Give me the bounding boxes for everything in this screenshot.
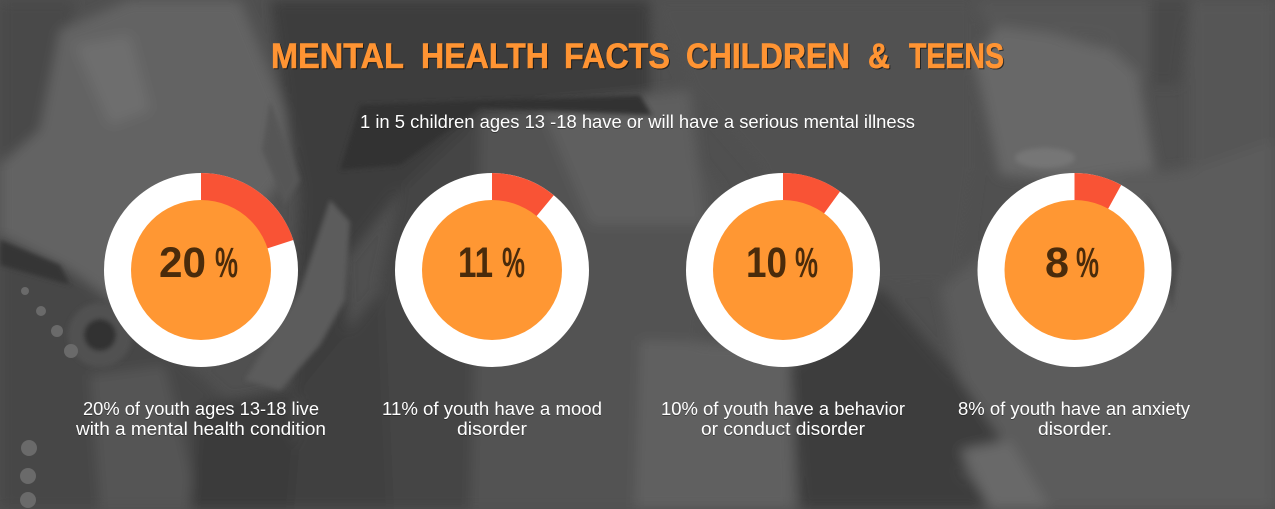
title: & (868, 37, 890, 76)
donut chart: 20%: 20 (159, 239, 206, 287)
caption: 20% (75, 399, 326, 439)
donut chart: 8%: 8 (1045, 239, 1069, 287)
donut chart: 8% (978, 173, 1172, 367)
caption: 10% (661, 399, 905, 439)
donut chart: 11%: % (502, 239, 525, 287)
title: HEALTH (421, 37, 549, 76)
donut chart: 20% (104, 173, 298, 367)
caption: 8% (958, 399, 1190, 439)
title: MENTAL (271, 37, 404, 76)
caption: 10%: or conduct disorder (701, 419, 865, 439)
caption: 8%: 8% of youth have an anxiety (958, 399, 1190, 419)
caption: 20%: with a mental health condition (75, 419, 326, 439)
donut chart: 11%: 11 (458, 239, 493, 287)
title: FACTS (564, 37, 670, 76)
title: TEENS (909, 37, 1004, 76)
caption: 11%: disorder (457, 419, 527, 439)
caption: 8%: disorder. (1038, 419, 1112, 439)
donut chart: 20%: % (215, 239, 238, 287)
title: CHILDREN (686, 37, 850, 76)
caption: 11% (382, 399, 602, 439)
donut chart: 10%: 10 (746, 239, 787, 287)
donut chart: 11% (395, 173, 589, 367)
donut chart: 10%: % (795, 239, 818, 287)
caption: 11%: 11% of youth have a mood (382, 399, 602, 419)
caption: 20%: 20% of youth ages 13-18 live (83, 399, 319, 419)
subtitle: 1 in 5 children ages 13 -18 have or will have a serious mental illness (360, 112, 915, 132)
caption: 10%: 10% of youth have a behavior (661, 399, 905, 419)
donut chart: 8%: % (1076, 239, 1099, 287)
donut chart: 10% (686, 173, 880, 367)
title (271, 37, 1004, 76)
